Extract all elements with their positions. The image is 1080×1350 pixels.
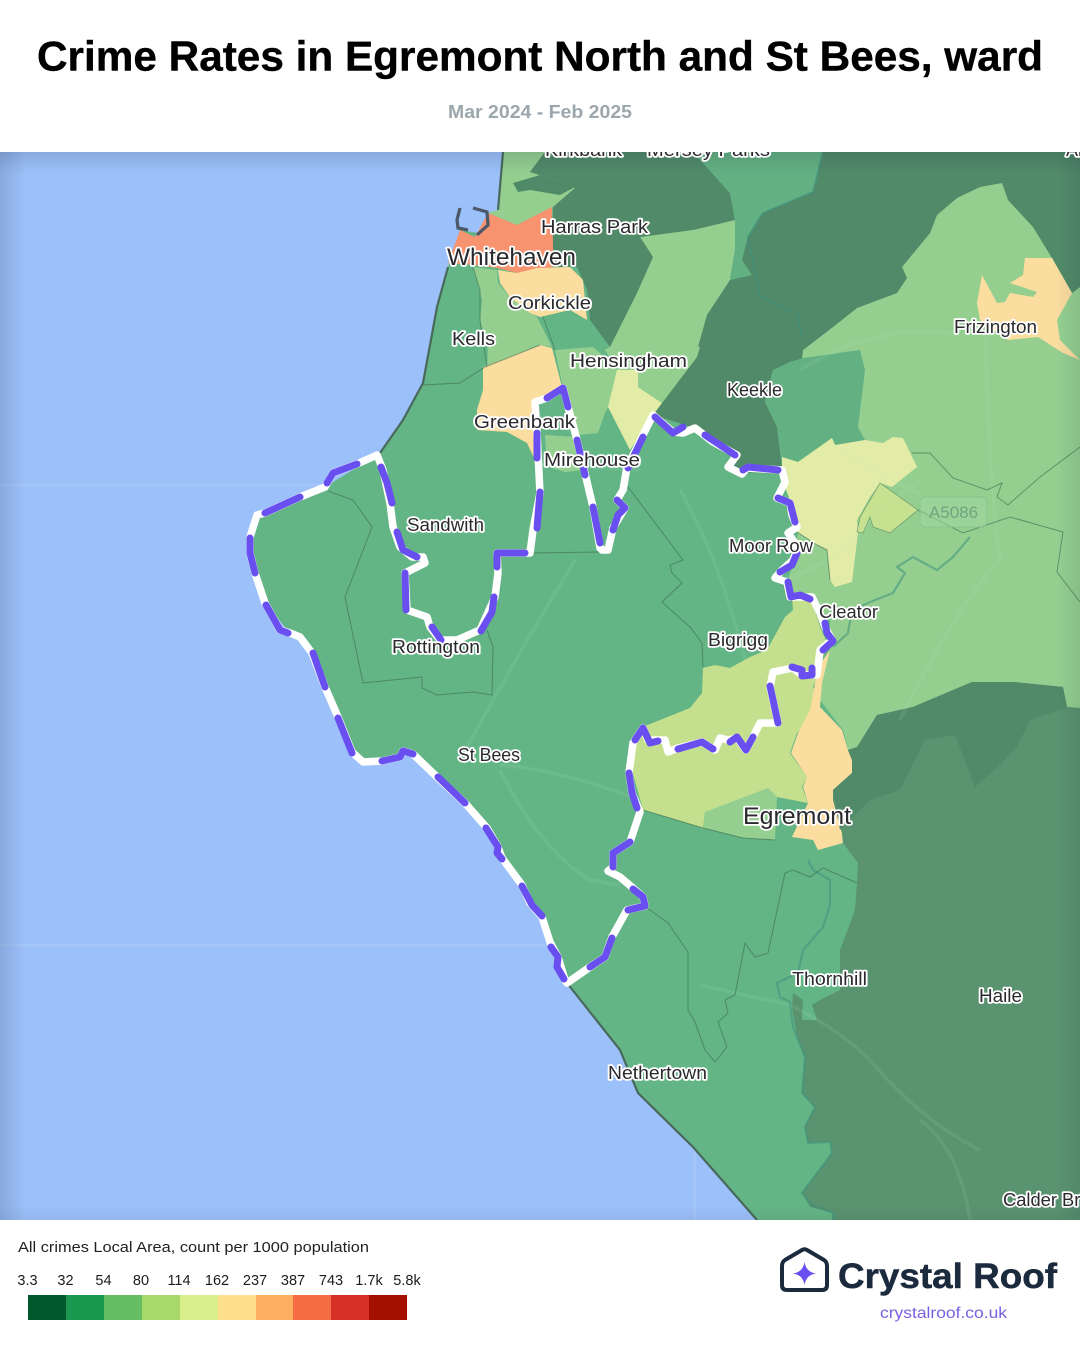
website: crystalroof.co.uk [880,1305,1008,1322]
legend values: 80 [133,1273,149,1289]
legend values: 3.3 [17,1273,38,1289]
Whitehaven salmon centre [448,207,553,273]
wordmark: Crystal Roof [838,1257,1057,1296]
legend values: 5.8k [393,1273,421,1289]
dark pocket north [513,175,575,195]
darker fell tone [833,682,1067,830]
coast dark edge [380,152,757,1220]
place labels: Sandwith [407,515,484,535]
place labels: Mirehouse [544,450,640,470]
mid green block east of Keekle [765,350,865,462]
Egremont light green patch [703,788,777,840]
place labels: Frizington [954,317,1037,337]
lime small patch [857,483,918,533]
dark south east [792,682,1080,1220]
land base [250,152,1080,1220]
logo: Crystal Roof [782,1249,1057,1322]
Hensingham north light patch [605,346,700,403]
edge shading [0,152,1080,1220]
north light green area [488,152,575,225]
legend title: All crimes Local Area, count per 1000 population [18,1239,369,1256]
legend values: 162 [205,1273,229,1289]
Greenbank peach [477,345,562,460]
Hensingham pale yellow [608,370,662,450]
place labels: Greenbank [474,412,576,432]
Kells east light green [473,267,552,367]
place labels: Moor Row [729,536,814,556]
Mirehouse light green [545,435,580,472]
place labels [392,140,1080,1210]
Egremont peach [791,650,852,850]
lime Bigrigg and Egremont west [632,597,827,828]
place labels: Rottington [392,637,480,657]
legend values: 743 [319,1273,343,1289]
place labels: Corkickle [508,293,591,313]
subtitle: date range: Mar 2024 - Feb 2025 [448,102,632,122]
mid green top strip [730,250,735,278]
dark Keekle and north east [653,152,1080,474]
place labels: Bigrigg [708,630,768,650]
place labels: St Bees [458,745,520,765]
legend [17,1239,421,1320]
place labels: Harras Park [541,217,649,237]
title: Crime Rates in Egremont North and St Bees, ward [37,32,1043,80]
legend values: 1.7k [355,1273,383,1289]
east of town light green area [605,220,735,350]
Frizington peach [977,258,1080,360]
place labels: Thornhill [792,969,867,989]
place labels: Haile [979,986,1022,1006]
place labels: Keekle [727,380,782,400]
place labels: Nethertown [608,1063,707,1083]
place labels: Cleator [819,602,878,622]
legend values: 237 [243,1273,267,1289]
Corkickle peach [498,267,587,320]
place labels: Whitehaven [447,244,576,271]
legend values: 54 [95,1273,112,1289]
choropleth map [0,140,1080,1220]
place labels: Mersey Parks [647,140,770,160]
east light green [765,183,1080,750]
place labels: Egremont [743,803,851,830]
legend colour scale [28,1295,407,1320]
ward boundary: white base [250,388,832,983]
ward boundary: purple dashes [250,388,833,979]
rivers [748,152,970,1220]
pale yellow area [782,437,917,587]
road shield: A5086 [920,497,987,527]
legend values: 114 [167,1273,191,1289]
harbour walls [457,208,488,235]
dark top centre [530,152,735,347]
place labels: Hensingham [570,351,687,371]
area boundaries [328,267,1080,1062]
road shield: A5086: A5086 [929,503,978,522]
legend values: 32 [57,1273,74,1289]
Hensingham light green [555,347,620,435]
legend values [17,1273,421,1289]
place labels: Kells [452,329,495,349]
icon: house with sparkle [782,1249,827,1290]
roads (faint) [460,320,1000,1220]
place labels: Kirkbank [545,140,623,160]
legend values: 387 [281,1273,305,1289]
